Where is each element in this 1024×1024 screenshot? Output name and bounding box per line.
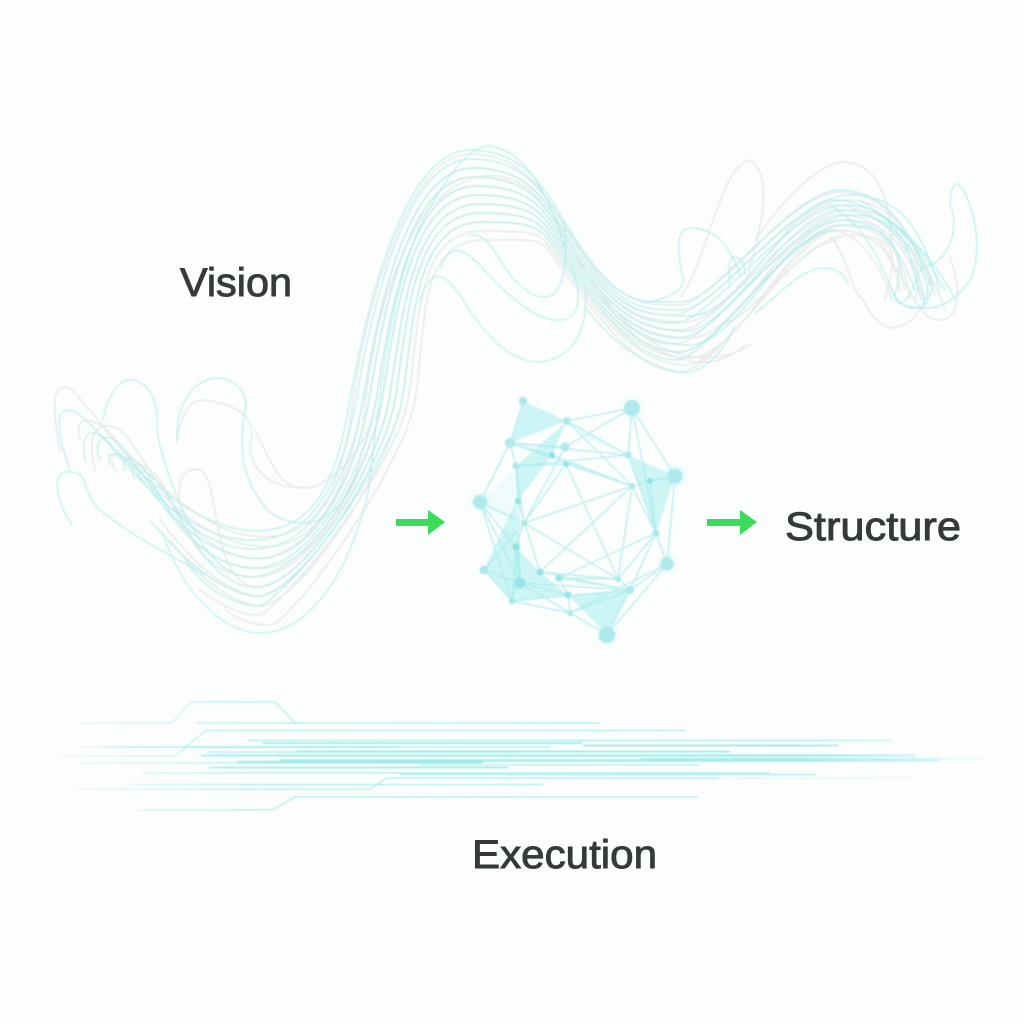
bright central lines bbox=[201, 740, 983, 768]
structure label: Structure bbox=[785, 505, 961, 549]
network edges bbox=[480, 401, 675, 635]
execution lines bbox=[60, 702, 983, 810]
vision label: Vision bbox=[180, 261, 292, 305]
circuit traces bbox=[60, 702, 910, 810]
flowing wave: vision bbox=[55, 146, 977, 633]
execution label: Execution bbox=[472, 833, 657, 877]
network node glow bbox=[472, 399, 684, 644]
wave strands: grey bbox=[55, 154, 957, 625]
arrow: network to structure label bbox=[707, 510, 757, 535]
network nodes bbox=[473, 397, 682, 643]
network: structure bbox=[472, 397, 684, 644]
network faces bbox=[480, 401, 675, 635]
wave strands: cyan bbox=[57, 146, 977, 633]
arrow: vision to structure bbox=[396, 510, 445, 535]
